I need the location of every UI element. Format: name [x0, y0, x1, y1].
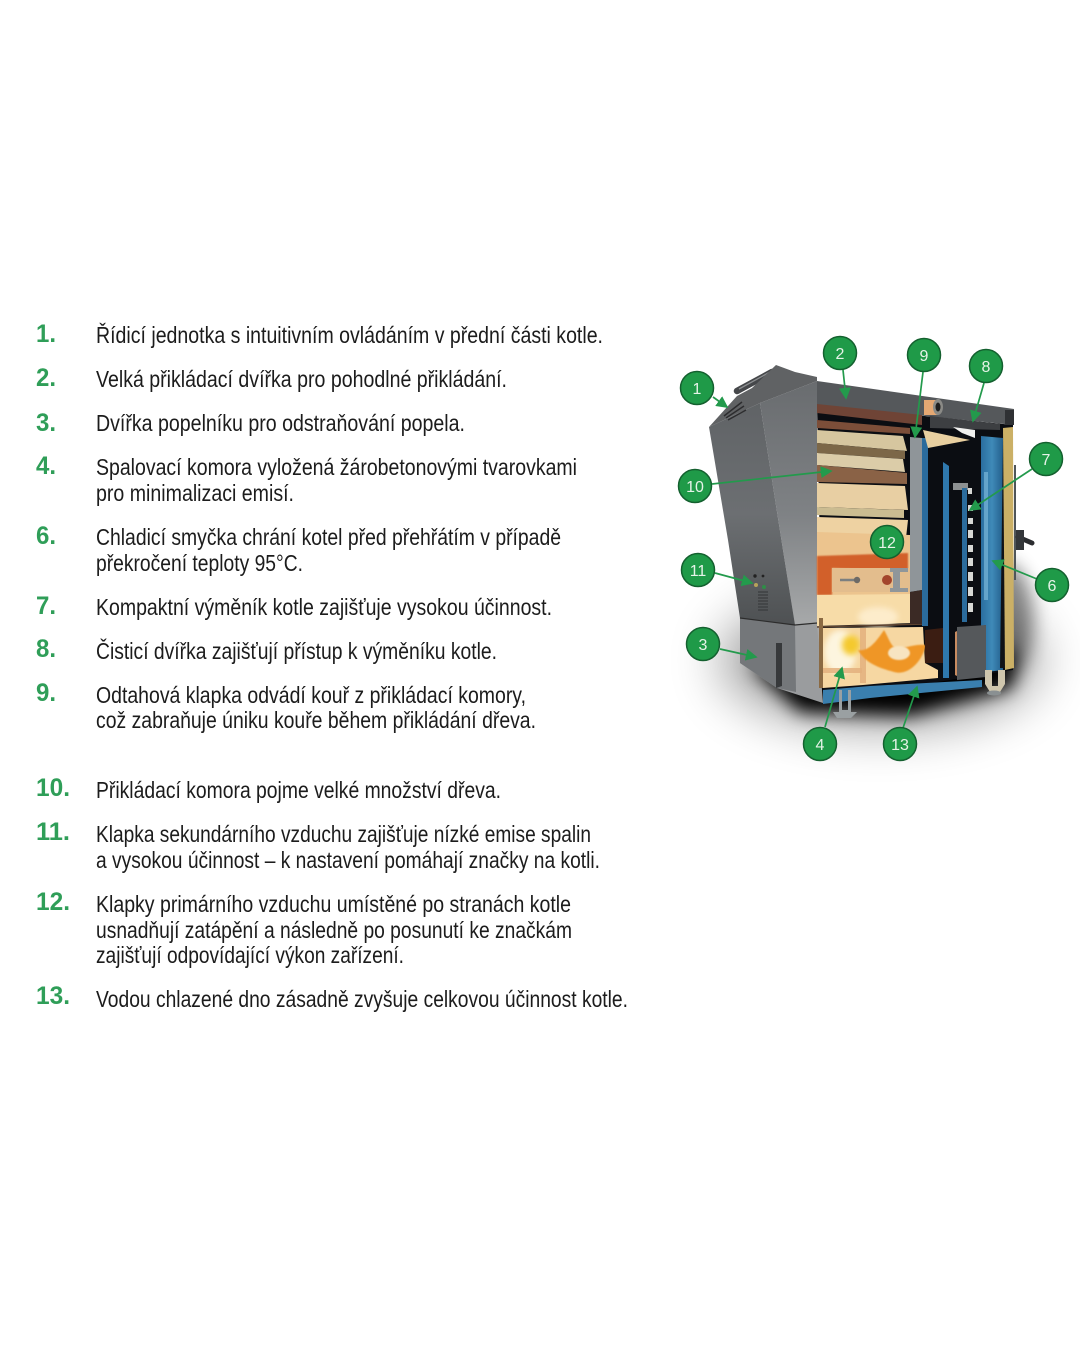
callout 7: 7: [1042, 452, 1051, 469]
callout 2: [824, 336, 856, 398]
lower shaped bricks: [817, 594, 913, 627]
callout 11: [682, 554, 752, 586]
cleaning door: [955, 625, 986, 680]
callout 6: [993, 561, 1068, 602]
item 4: [36, 452, 577, 506]
callout 12: [870, 526, 904, 558]
side lever: [1014, 465, 1032, 580]
grey side wall: [760, 381, 817, 625]
callout 13: 13: [891, 737, 909, 754]
callout 13: [884, 687, 917, 760]
grey front panel: [709, 403, 795, 625]
item 2: 2.: [36, 364, 56, 392]
yellow insulation: [1003, 427, 1014, 670]
item 9: Odtahová klapka odvádí kouř z přikládací komory,: [96, 682, 526, 708]
item 12: Klapky primárního vzduchu umístěné po stranách kotle: [96, 891, 571, 917]
item 9: 9.: [36, 679, 56, 707]
item 6: 6.: [36, 522, 56, 550]
callout 1: 1: [693, 381, 702, 398]
callout 8: 8: [982, 359, 991, 376]
item 12: 12.: [36, 888, 70, 916]
callout 9: [908, 338, 940, 437]
item 10: 10.: [36, 774, 70, 802]
flue pipe: [924, 399, 943, 415]
top rail: [817, 381, 1014, 430]
item 1: Řídicí jednotka s intuitivním ovládáním v přední části kotle.: [96, 322, 603, 348]
item 9: což zabraňuje úniku kouře během přikládání dřeva.: [96, 707, 536, 733]
item 10: Přikládací komora pojme velké množství dřeva.: [96, 777, 501, 803]
blue water jacket: [910, 427, 1006, 678]
boiler illustration: [709, 365, 1040, 728]
callout 9: 9: [920, 348, 929, 365]
heat exchanger: [953, 483, 973, 622]
item 13: 13.: [36, 982, 70, 1010]
item 7: 7.: [36, 592, 56, 620]
item 13: [36, 982, 628, 1012]
callout 4: 4: [816, 737, 825, 754]
adjustable feet: [833, 670, 1005, 718]
item 12: usnadňují zatápění a následně po posunutí ke značkám: [96, 917, 572, 943]
item 4: pro minimalizaci emisí.: [96, 480, 294, 506]
item 8: [36, 635, 497, 664]
floor shadow: [720, 562, 1040, 728]
callouts: [678, 336, 1068, 760]
callout 6: 6: [1048, 578, 1057, 595]
item 1: 1.: [36, 320, 56, 348]
item 2: Velká přikládací dvířka pro pohodlné přikládání.: [96, 366, 507, 392]
item 7: Kompaktní výměník kotle zajišťuje vysokou účinnost.: [96, 594, 552, 620]
interior dark background: [817, 405, 1013, 700]
item 6: [36, 522, 561, 576]
numbered list: [36, 320, 628, 1012]
item 6: Chladicí smyčka chrání kotel před přehřátím v případě: [96, 524, 561, 550]
air flap controls: [753, 574, 768, 610]
callout 12: 12: [878, 535, 896, 552]
item 10: [36, 774, 501, 803]
item 13: Vodou chlazené dno zásadně zvyšuje celkovou účinnost kotle.: [96, 986, 628, 1012]
callout 1: [680, 372, 727, 407]
item 12: [36, 888, 572, 968]
callout 10: 10: [686, 479, 704, 496]
item 8: 8.: [36, 635, 56, 663]
item 8: Čisticí dvířka zajišťují přístup k výměníku kotle.: [96, 637, 497, 664]
callout 3: 3: [699, 637, 708, 654]
callout 11: 11: [690, 563, 706, 580]
handle: [737, 372, 772, 391]
ash door box: [740, 618, 823, 703]
control unit top: [709, 365, 817, 427]
item 12: zajišťují odpovídající výkon zařízení.: [96, 942, 404, 968]
item 11: a vysokou účinnost – k nastavení pomáhají značky na kotli.: [96, 847, 600, 873]
item 11: 11.: [36, 818, 70, 846]
callout 7: [970, 442, 1062, 510]
firebox: [817, 618, 943, 688]
water-cooled bottom: [823, 680, 982, 704]
callout 10: [678, 470, 831, 502]
item 11: [36, 818, 600, 873]
callout 8: [970, 350, 1002, 421]
callout 3: [686, 628, 756, 660]
item 3: 3.: [36, 409, 56, 437]
item 9: [36, 679, 536, 733]
item 4: Spalovací komora vyložená žárobetonovými tvarovkami: [96, 454, 577, 480]
item 3: Dvířka popelníku pro odstraňování popela.: [96, 410, 465, 436]
item 6: překročení teploty 95°C.: [96, 550, 303, 576]
fire band: [817, 532, 910, 597]
item 11: Klapka sekundárního vzduchu zajišťuje nízké emise spalin: [96, 821, 591, 847]
callout 2: 2: [836, 346, 845, 363]
callout 4: [804, 668, 842, 760]
refractory shaped bricks: [817, 420, 910, 538]
item 4: 4.: [36, 452, 56, 480]
